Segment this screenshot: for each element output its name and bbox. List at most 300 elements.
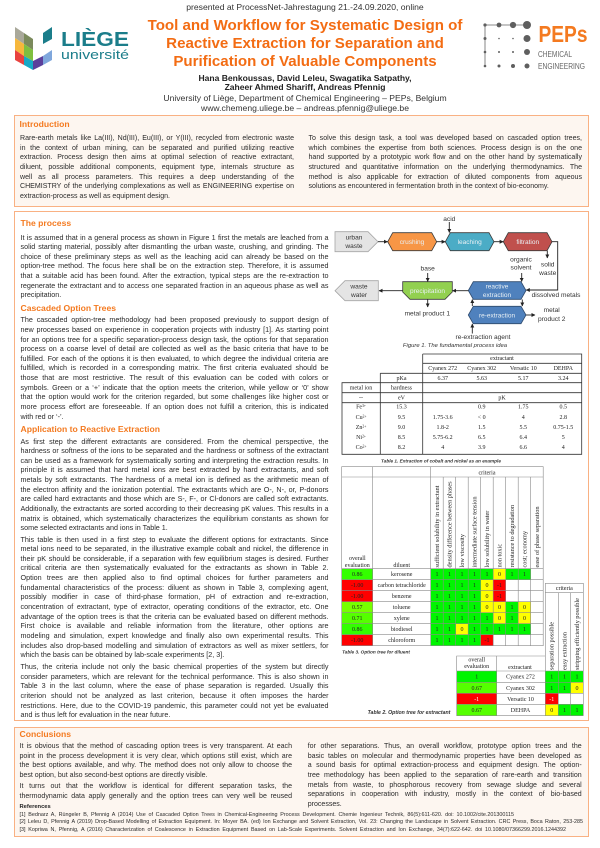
table 3 headers: low solubility in water [484,510,491,568]
table 3 row: biodiesel: 1 [486,627,488,633]
table 3 row: biodiesel: 1 [510,627,514,633]
table 3 row: carbon tetrachloride: 1 [460,583,464,589]
table 3 grid [342,467,543,646]
heading: cascaded option trees: Cascaded Option Trees [20,303,116,313]
table 3 headers: intermediate surface tension [471,496,478,568]
text: introduction right column: method is also applicable for extraction of diluted components from aqueous [308,174,582,181]
table 1 text: pKa [396,376,407,382]
table 3 row: toluene: 1 [473,605,476,611]
table 2 row: Cyanex 272: 1 [576,675,578,681]
table 3 row: chloroform: -1.00 [351,638,363,644]
table 3 row: benzene: -1 [497,594,502,600]
text: application paragraph 2: concentration of extractant, type of extractor, operating conditions of the extractor, etc. One [20,602,328,611]
text: introduction right column: which combines the expertise from both sciences. Process design is on the one [308,145,582,152]
table 1 text: 3.9 [478,445,485,451]
table 3 row: toluene: 0.57 [352,605,362,611]
table 1 text: Cyanex 272 [428,366,457,372]
table 2 row: Cyanex 302: Cyanex 302 [506,686,535,692]
table 3 row: carbon tetrachloride: -1.00 [351,583,363,589]
table 3 row: toluene: 0 [486,605,488,611]
precipitation step: precipitation [410,288,445,295]
text: the process: that a suitable acid has been found. After the extraction, typical steps are the re-extraction to [20,271,328,280]
text: introduction right column: hand supported by a prototypic work flow and on the other hand by systematically [308,154,582,161]
flow labels: acid [443,216,456,223]
table 1 text: 0.9 [478,405,485,411]
waste water output: waste [349,284,368,290]
heading: introduction: Introduction [20,119,70,129]
logo: Liège université: LIÈGE [61,28,129,51]
text: the process: choice of these preliminary steps as well as the leaching acid can already be based on the [20,252,328,261]
table 3 row: toluene [352,605,526,611]
crushing step [388,233,437,251]
text: conclusions paragraph 1 [20,742,292,779]
caption: table 3: Table 3. Option tree for diluent [342,650,410,654]
table 2 colored cells [457,671,583,716]
table 2 row: DEHPA: 0.67 [471,708,482,714]
table 2 row: Cyanex 302: 1 [550,686,553,692]
reactive extraction step: reactive [486,284,509,290]
table 3 row: toluene: toluene [393,605,411,611]
text: conclusions right column: processes. [308,801,342,808]
text: application paragraph 2: modeling and simulation, expert knowledge and finally also own experimental results. This [20,631,328,640]
text: introduction left column: extraction-process as well as equipment design. [20,193,170,200]
waste water output: water [350,292,368,299]
table 1 text: pK [498,396,506,402]
panel: introduction [14,115,588,207]
text: application paragraph 2: metal ions need to be separated, in the illustrative example cobalt and nickel, the difference in [20,544,328,553]
text: application paragraph 2: includes also drop-based modelling and simulation of extractors as well as mixer settlers, for [20,641,328,650]
table 3 row: biodiesel: 1 [498,627,501,633]
text: conclusions paragraph 1: best option, but also second-best options are directly visible. [20,772,208,779]
table 3 row: benzene: benzene [392,594,412,600]
table 3 row: carbon tetrachloride: 1 [473,583,476,589]
table 3 row: kerosene: 1 [486,572,488,578]
text: introduction right column: To solve this design task, a tool was developed based on cascaded option trees, [308,135,582,142]
table 1 text: 3.24 [558,376,569,382]
precipitation step [403,282,452,299]
table 3 row: chloroform: 1 [448,638,451,644]
table 3 row: benzene: -1.00 [351,594,363,600]
logo: PEPs chemical engineering: PEPs [538,21,588,47]
table 3 row: carbon tetrachloride: carbon tetrachloride [378,583,426,589]
table 2 row: DEHPA: 0 [550,708,553,714]
text: application paragraph 2: possibly modifier in case of third-phase formation, pH of extraction and re-extraction, [20,592,328,601]
table 1 text: DEHPA [554,366,574,372]
table 2 row: Cyanex 272 [475,675,578,681]
logo: PEPs chemical engineering [483,21,588,71]
table 2 headers: extractant [508,665,532,671]
table 3 row: kerosene: 1 [460,572,464,578]
table 3 headers: low viscosity [459,533,466,568]
table 1 text: 2+ [363,414,366,418]
table 2 headers: easy extraction [561,631,568,670]
logo: Liège université: université [61,48,129,62]
caption: figure 1: Figure 1. The fundamental process idea [403,343,508,349]
table 2 row: DEHPA: 1 [576,708,578,714]
text: application paragraph 1 [20,436,328,532]
filtration step [503,233,552,251]
table 1 text: eV [398,396,406,402]
authors [198,72,412,92]
table 3 row: xylene: 1 [436,616,438,622]
re-extraction step [468,306,526,324]
filtration step: filtration [516,239,539,246]
table 3 row: kerosene [352,572,526,578]
table 1 grid [342,354,582,454]
table 1 text: Fe [356,405,362,411]
table 3 row: benzene: 1 [448,594,451,600]
authors: Hana Benkoussas, David Leleu, Swagatika Satpathy, [198,72,412,82]
table 1 text: Cyanex 302 [467,366,496,372]
caption: table 1: Table 1. Extraction of cobalt and nickel as an example [381,458,501,464]
table 2 headers: evaluation [464,664,489,670]
arrows [378,222,558,334]
table 3 row: benzene [351,594,502,600]
table 3 row: biodiesel: biodiesel [391,627,413,633]
table 1: extractant pK values [342,354,582,454]
table 1 text: 9.5 [398,415,405,421]
table 3 row: kerosene: kerosene [391,572,413,578]
flow labels: base [421,265,435,272]
table 2 row: Cyanex 272: 1 [563,675,566,681]
flow labels: re-extraction agent [456,334,511,341]
text: introduction left column [20,134,294,200]
table 3 row: toluene: 0 [498,605,501,611]
text: cascaded option trees: fulfilled, which is recorded in a corresponding matrix. The first criteria evaluated should be [20,363,328,372]
table 3 row: kerosene: 1 [436,572,438,578]
table 3 row: kerosene: 1 [523,572,526,578]
table 3 row: carbon tetrachloride: 1 [436,583,438,589]
text: application paragraph 2: fundamental characteristics of the process: diluent as shown in Table 3, complexing agent, [20,583,328,592]
text: cascaded option trees: for an options tree for a specific separation-process design task, the options for that separation [20,334,328,344]
table 1 text: 15.3 [396,405,407,411]
table 3 row: kerosene: 1 [473,572,476,578]
table 3 headers: diluent [393,563,410,569]
table 2 headers: criteria [556,586,573,592]
table 3 headers [345,470,541,569]
table 1 text: < 0 [478,415,486,421]
flow labels: dissolved metals [532,292,581,299]
table 3 colored cells [342,569,531,646]
table 3 headers: resistance to degradation [509,504,516,568]
table 3 row: toluene: 1 [510,605,514,611]
text: application paragraph 1: metals by soft extractants. The hardness of a metal ion is defined as the arithmetic mean of [20,475,328,484]
table 1 text: 5.17 [518,376,529,382]
text: application paragraph 3: consider parameters, which are relevant for the technical performance. This is also shown in [20,672,328,681]
table 3 row: xylene: 1 [448,616,451,622]
table 1 text: 2+ [362,424,366,428]
table 1 text: 6.37 [437,376,448,382]
text: application paragraph 2: advantage of the option trees is that the criteria can be evaluated based on different methods. [20,612,328,621]
references [20,804,583,832]
logo: PEPs chemical engineering: ENGINEERING [538,62,585,71]
table 3 row: xylene: 1 [510,616,514,622]
table 2 headers: separation possible [549,622,556,670]
urban waste input: urban [346,234,363,242]
flow labels: metal [544,307,560,314]
table 1 text: Co [356,445,363,451]
text: application paragraph 3 [20,662,328,719]
table 3 headers: criteria [478,470,496,476]
text: conclusions paragraph 1: the best options available, and why. The method does not only allow to choose the [20,762,292,769]
table 3 headers: cost; economy [521,530,528,568]
panel: conclusions [14,727,588,837]
table 1 text: 1.8-2 [436,425,449,431]
table 2 row: Cyanex 272: Cyanex 272 [506,675,535,681]
table 1 text: 5.63 [476,376,487,382]
text: cascaded option trees: symbols. Green or a ‘+’ indicate that the option meets the criterion, while yellow or ‘0’ show [20,383,328,392]
panel: main content [14,211,588,721]
text: introduction left column: CHEMISTRY of the underlying complexations as well as ENGINEERING expertise on [20,183,294,190]
urban waste input: waste [344,243,363,250]
text: introduction left column: extraction. Process design then aims at optimal selection of reactive extractant, [20,154,294,161]
heading: conclusions: Conclusions [20,729,71,739]
text: cascaded option trees: process on a coarse level of detail are collected as well as the basic criteria that have to be [20,344,328,353]
table 3 row: chloroform: 1 [436,638,438,644]
references: [2] Leleu D, Pfennig A (2019) Drop-Based Modelling of Extraction Equipment. In: Moyer BA. (ed) Ion Exchange and Solvent Extraction, Vol. 23: Changing the Landscape in Solvent Extraction. CRC Press, Boca Raton, 253-285 [20,819,583,825]
table 3 row: toluene: 1 [448,605,451,611]
table 1 text: 4 [522,415,525,421]
table 1 text: Ni [356,435,362,441]
table 1 text: extractant [490,356,514,362]
table 1 text: 4 [441,445,444,451]
table 2 row: Versatic 10 [474,697,554,703]
table 1 text: 6.5 [478,435,485,441]
title: Tool and Workflow for Systematic Design of [148,17,462,34]
table 2 row: Cyanex 302: 0 [576,686,578,692]
table 3 row: biodiesel: 1 [448,627,451,633]
text: the process: precipitation. [20,290,61,299]
table 2 row: DEHPA [471,708,578,714]
table 3 row: xylene: 1 [486,616,488,622]
flow labels [405,216,581,341]
affiliation [163,93,447,113]
table 3 row: xylene: 1 [460,616,464,622]
table 3 row: benzene: 1 [436,594,438,600]
text: application paragraph 2: critical criteria are then systematically evaluated for the extractants as shown in Table 2. [20,563,328,572]
table 3 row: xylene: 1 [473,616,476,622]
table 3 headers: sufficient solubility in extractant [434,485,441,568]
text: application paragraph 2: which the basis can be obtained by lab-scale experiments [2, 3]. [20,650,224,659]
table 2 row: Cyanex 272: 1 [550,675,553,681]
references: [3] Kopriwa N, Pfennig, A (2016) Characterization of Coalescence in Extraction Equipment Based on Lab-Scale Experiments. Solvent Extraction and Ion Exchange, 34(7):622-642. doi 10.1080/07366299.2016.1244392 [20,826,566,832]
table 2: option tree for extractant [457,583,583,716]
text: application paragraph 3: Thus, the criteria include not only the basic chemical properties of the system but directly [20,662,328,671]
re-extraction step: re-extraction [479,312,515,319]
text: cascaded option trees: that the option would work for the criterion regarded, but some challenges like higher cost or [20,392,328,401]
table 1 text: 9.0 [398,425,405,431]
table 1 text: 5.5 [520,425,527,431]
text: introduction left column: diluent, possible additional components, equipment type, internals structure as [20,164,294,171]
affiliation: www.chemeng.uliege.be – andreas.pfennig@uliege.be [201,103,409,113]
table 3 row: biodiesel: 1 [436,627,438,633]
table 1 text: -- [359,396,363,402]
flow labels: product 2 [538,316,566,323]
logo: PEPs chemical engineering: CHEMICAL [538,50,572,59]
text: application paragraph 1: some selected extractants and ions in Table 1. [20,523,168,532]
table 2 headers [464,586,581,671]
table 2 row: Versatic 10: -1 [549,697,554,703]
table 3 headers: overall [349,556,366,562]
table 3 headers: density difference between phases [446,481,453,568]
text: cascaded option trees: those that are most restrictive. The result of this evaluation can be coded with colors or [20,373,328,382]
table 3 row: kerosene: 0 [498,572,501,578]
flow labels: metal product 1 [405,310,450,317]
table 2 row: DEHPA: DEHPA [511,708,531,714]
text: the process: solid starting material, possibly after dismantling the urban waste, crushing, and grinding. The [20,242,328,251]
table 1 text: 2+ [363,444,366,448]
text: introduction left column: Rare-earth metals like La(III), Nd(III), Eu(III), or Y(III), recycled from electronic waste [20,135,294,142]
logo: Liège université [15,27,129,70]
flow labels: solvent [511,264,532,272]
table 3 row: xylene: 0 [523,616,526,622]
references: [1] Bednarz A, Rüngeler B, Pfennig A (2014) Use of Cascaded Option Trees in Chemical-Engineering Process Development. Chemie Ingenieur Technik, 86(5):611-620. doi: 10.1002/cite.201300115 [20,812,514,818]
reactive extraction step: extraction [483,292,511,299]
table 3 row: xylene [352,616,526,622]
table 3 row: carbon tetrachloride: 1 [448,583,451,589]
table 1 text: hardness [391,386,413,392]
table 3 row: toluene: 1 [460,605,464,611]
text: application paragraph 2 [20,534,328,659]
table 2 row: Cyanex 272: 1 [475,675,478,681]
table 3 row: xylene: 0 [498,616,501,622]
text: conclusions paragraph 2 [20,782,292,800]
table 1 text: 0.5 [560,405,567,411]
text: cascaded option trees: The cascaded option-tree methodology had been proposed previously to support design of [20,315,328,324]
table 3 row: carbon tetrachloride [351,583,502,589]
table 3 row: biodiesel: 1 [523,627,526,633]
table 3 row: kerosene: 1 [448,572,451,578]
table 1 text: 8.5 [398,435,405,441]
flow labels: waste [538,270,557,277]
table 1 text: Zn [356,425,362,431]
text: application paragraph 1: are called hard extractants and those which are S-, F-, or Cl-donors are called soft extractants. [20,494,328,503]
text: the process: option-tree method. The focus here shall be on the extraction step. Therefore, it is assumed [20,261,328,270]
table 1 text: 0.75-1.5 [553,425,573,431]
table 1 text: 6.4 [520,435,527,441]
text: application paragraph 1: hardness or softness of the ions to be separated and the hardness or softness of the extractant [20,446,328,455]
text: conclusions right column: a sound basis for optimal extraction-process and equipment design. The option- [308,762,582,769]
table 1 text: 2+ [362,434,366,438]
table 1 text: 2.8 [560,415,567,421]
text: introduction right column: solutions as encountered in fermentation broth in the context of bio-economy. [308,183,549,190]
table 3 row: benzene: 1 [473,594,476,600]
leaching step [445,233,494,251]
table 3 row: carbon tetrachloride: 0 [486,583,488,589]
text: conclusions right column: metals from waste, to phosphorous recovery from sewage sludge and several [308,782,582,789]
table 1 text: 8.2 [398,445,405,451]
table 3 row: biodiesel: 1 [473,627,476,633]
text: cascaded option trees: more process effort are foreseeable. If an option does not fulfill a criterion, this is indicated [20,402,328,411]
flow labels: organic [510,256,533,263]
table 1 text: 1.75 [518,405,529,411]
table 3 row: chloroform: chloroform [388,637,416,644]
text: cascaded option trees [20,315,328,421]
table 3 row: toluene: 1 [436,605,438,611]
text: the process: It is assumed that in a general process as shown in Figure 1 first the metals are leached from a [20,232,328,242]
table 3 row: biodiesel: 0.86 [352,627,362,633]
affiliation: University of Liège, Department of Chemical Engineering – PEPs, Belgium [163,93,447,103]
table 3 row: carbon tetrachloride: -1 [497,583,502,589]
table 3 row: benzene: 1 [460,594,464,600]
text: introduction right column [308,134,582,190]
table 3 row: kerosene: 1 [510,572,514,578]
text: application paragraph 1: principle it is assumed that hard metal ions are best extracted by hard extractants, and soft [20,465,328,474]
text: application paragraph 1: the electron affinity and the ionization potential. The extractants which are O-, N-, or, P-donors [20,485,328,494]
heading: application to reactive extraction: Application to Reactive Extraction [20,424,160,434]
figure 1: process flow diagram [335,216,581,341]
text: conclusions paragraph 2: thermodynamic data apply generally and the option trees can very well be reused [20,793,292,800]
table 1 text [350,356,574,451]
text: cascaded option trees: new processes based on experience in cooperation projects with industry [1]. As starting point [20,325,328,334]
text: the process [20,232,328,299]
table 3 row: xylene: xylene [394,616,410,622]
text: conclusions paragraph 1: point in the process development it is very clear, which options still exist, which are [20,753,292,760]
text: introduction left column: in the context of urban mining, can be separated and purified utilizing reactive [20,145,294,152]
text: application paragraph 2: This table is then used in a first step to evaluate the different options for extractants. Since [20,534,328,544]
text: application paragraph 3: Table 3 in the last column, where the ease of phase separation is regarded. Usually this [20,681,328,690]
text: application paragraph 1: Additionally, the extractants are sorted according to their decreasing pK values. This results in a [20,504,328,513]
table 1 text: 5.75-6.2 [433,435,453,441]
table 1 text: 5 [562,435,565,441]
text: the process: regenerate the extractant and to access one separated fraction in an aqueous phase as well as [20,281,328,290]
text: introduction left column: well as all process parameters. This requires a deep understanding of the [20,174,294,181]
text: application paragraph 2: Option trees are then applied also to find optimal choices for further parameters and [20,573,328,582]
text: conclusions right column: tree methodology has been applied to the separation of rare-earth and transition [308,772,582,779]
text: application paragraph 1: can be used as a framework for systematically sorting and interpreting the extraction results. In [20,456,328,465]
text: conclusions right column: separations in cooperation with industry, mostly in the context of bio-based [308,791,582,798]
table 1 text: 3+ [362,404,366,408]
table 3 row: benzene: 0 [486,594,488,600]
table 3 row: toluene: 0 [523,605,526,611]
table 1 text: Versatic 10 [510,366,537,372]
table 2 row: Cyanex 302: 0.67 [471,686,482,692]
table 3 row: chloroform: 1 [473,638,476,644]
table 1 text: 4 [562,445,565,451]
table 2 row: Cyanex 302 [471,686,578,692]
leaching step: leaching [458,239,482,246]
table 3 row: chloroform: -1 [484,638,490,644]
caption: table 2: Table 2. Option tree for extractant [368,710,451,716]
text: application paragraph 3: and is thus left for evaluation in the near future. [20,710,170,719]
waste water output [335,281,378,301]
title: Purification of Valuable Components [173,53,437,70]
text: application paragraph 3: restrictions. Here, due to the COVID-19 pandemic, this parameter could not yet be evaluated [20,701,328,710]
text: cascaded option trees: fulfilled. For each of the options it is then evaluated, to which degree the individual criteria are [20,354,328,363]
text: application paragraph 1: As first step the different extractants are considered. From the chemical perspective, the [20,436,328,446]
title: Reactive Extraction for Separation and [166,35,444,52]
table 1 text: Cu [356,415,363,421]
table 2 row: Cyanex 302: 1 [563,686,566,692]
table 3 row: biodiesel: 0 [460,627,464,633]
table 2 row: Versatic 10: -1 [474,697,479,703]
table 1 text: 1.75-3.6 [433,415,453,421]
text: application paragraph 3: criterion should not be analyzed as last criterion, because it often imposes the harder [20,691,328,700]
table 3: option tree for diluent [342,467,543,646]
table 3 row: chloroform [351,637,490,644]
text: application paragraph 2: their pK should be considerable, if a separation with few equilibrium stages is desired. Further [20,554,328,563]
table 2 headers: overall [468,658,485,664]
table 2 row: DEHPA: 1 [563,708,566,714]
table 1 text: metal ion [350,386,372,392]
urban waste input [335,232,378,252]
text: conclusions right column [308,742,582,808]
table 2 headers: stripping efficiently possible [574,598,581,670]
heading: the process: The process [20,218,71,228]
table 3 row: chloroform: 1 [460,638,464,644]
text: conclusions right column: for other separations. Thus, an overall workflow, prototype option trees and the [308,743,582,750]
text: application paragraph 2: First choice is available and reliable information from the literature, other options are [20,621,328,630]
